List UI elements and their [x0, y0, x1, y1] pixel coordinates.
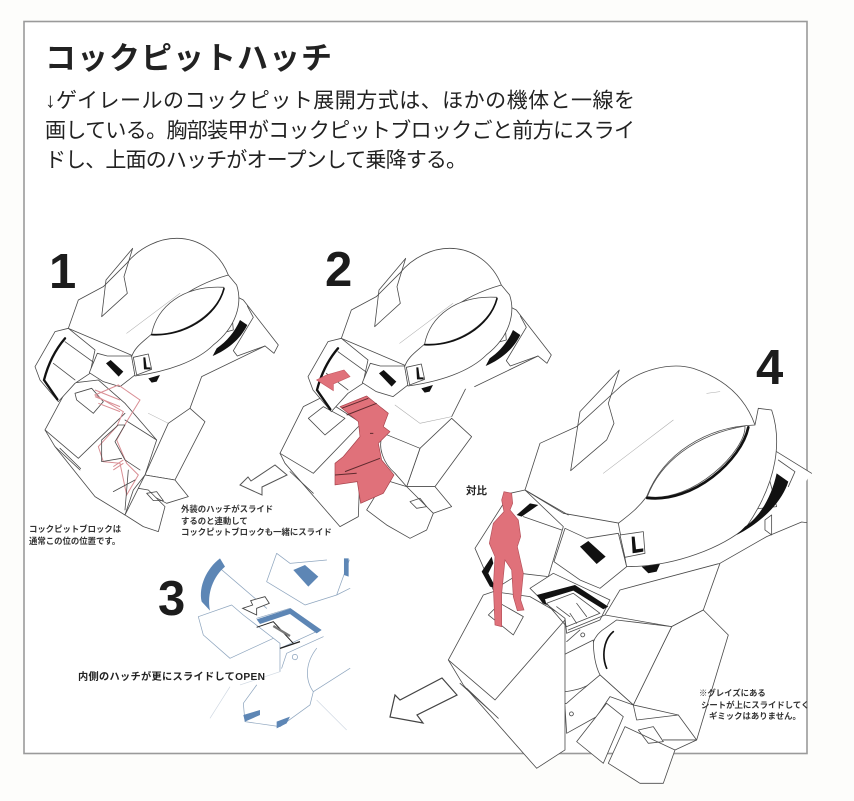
white arrow: [243, 597, 269, 615]
label: scale comparison: 対比: [466, 484, 487, 497]
caption 2: コックピットブロックも一緒にスライド: [181, 527, 332, 537]
figure 2: sliding block: [280, 248, 551, 538]
red human figure for scale: [489, 492, 524, 627]
head of figure 1: [35, 238, 278, 402]
caption 1: [29, 524, 122, 546]
caption 3: 内側のハッチが更にスライドしてOPEN: [78, 670, 265, 683]
note: シートが上にスライドしてく: [701, 700, 809, 710]
number 4: 4: [756, 341, 783, 395]
body text: 画している。胸部装甲がコックピットブロックごと前方にスライ: [45, 120, 635, 142]
blue line drawing: [198, 553, 350, 730]
number 2: 2: [325, 243, 352, 297]
figure 1: closed cockpit: [35, 238, 278, 532]
note: ギミックはありません。: [709, 711, 801, 721]
torso of figure 1: [45, 373, 205, 532]
caption 2: [181, 504, 332, 537]
body text: [45, 90, 635, 172]
arrow: slide direction 1: [240, 465, 287, 495]
title: コックピットハッチ: [45, 41, 332, 76]
note: [699, 688, 809, 721]
number 3: 3: [158, 572, 185, 626]
note: ※グレイズにある: [699, 688, 766, 698]
caption 2: するのと連動して: [181, 516, 248, 526]
number 1: 1: [49, 245, 76, 299]
lower body of figure 4: [448, 563, 728, 783]
caption 1: コックピットブロックは: [29, 524, 122, 534]
open hatch interior: [530, 573, 610, 642]
white arrow, figure 4: [390, 678, 457, 723]
head of figure 2: [308, 248, 551, 412]
torso of figure 2: [280, 383, 472, 538]
body text: ↓ゲイレールのコックピット展開方式は、ほかの機体と一線を: [45, 90, 635, 112]
caption 2: 外装のハッチがスライド: [181, 504, 273, 514]
head of figure 4: [475, 366, 812, 590]
figure 4: open cockpit with pilot: [448, 366, 812, 783]
caption 1: 通常この位の位置です。: [29, 536, 120, 546]
body text: ドし、上面のハッチがオープンして乗降する。: [45, 149, 467, 172]
red cockpit block: [335, 396, 394, 503]
cockpit block outline: [95, 385, 140, 510]
red arrow: [317, 370, 350, 391]
figure 3: inner hatch, blue: [198, 553, 350, 730]
